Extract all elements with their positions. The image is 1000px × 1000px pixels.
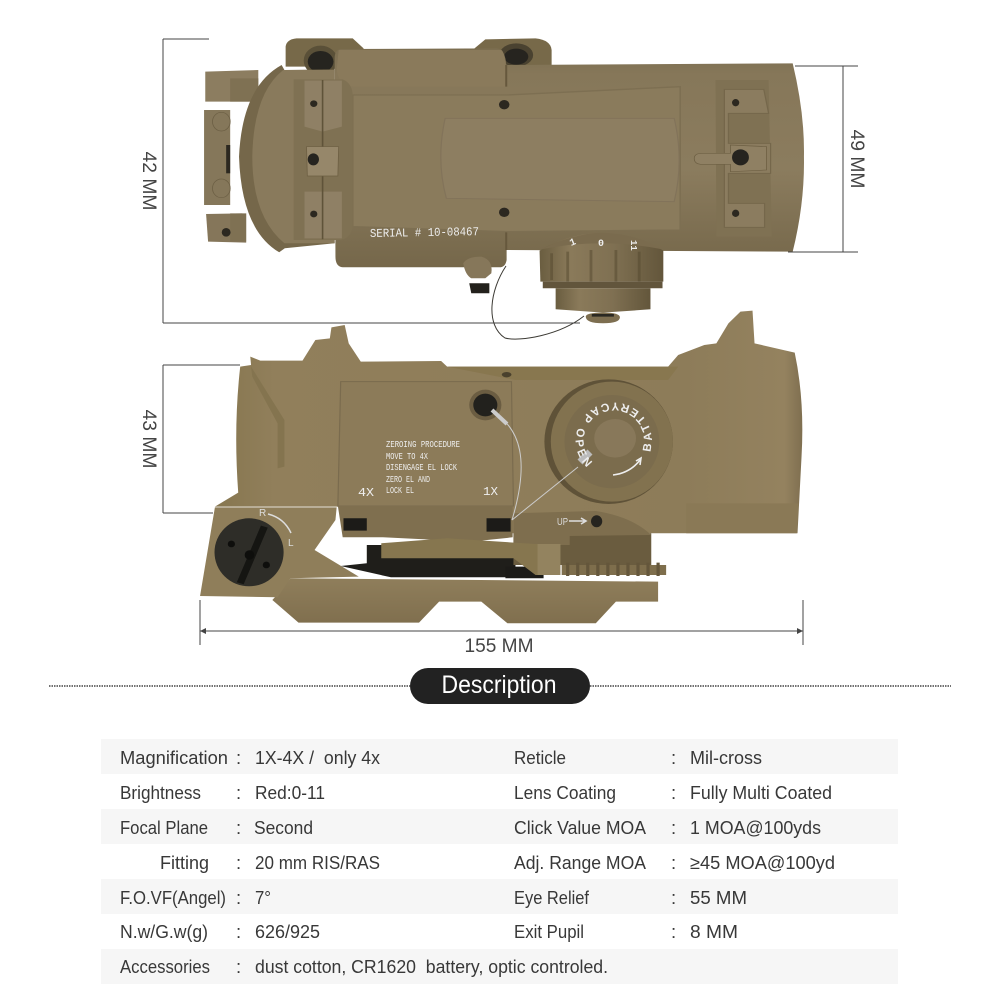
section divider [49, 668, 951, 704]
lower front shade [686, 503, 799, 533]
right values: Fully Multi Coated [690, 782, 832, 803]
colons: : [236, 782, 241, 803]
left values: Second [254, 817, 313, 838]
colons: : [236, 817, 241, 838]
left labels: Accessories [120, 956, 210, 977]
rail shadow parts [341, 545, 544, 578]
colons [236, 747, 676, 977]
right values: 55 MM [690, 887, 747, 908]
clamp box [338, 372, 513, 542]
right labels: Exit Pupil [514, 921, 584, 942]
left values: dust cotton, CR1620 battery, optic controled. [255, 956, 608, 977]
engraved marks: L [288, 538, 294, 549]
lever and gear [381, 538, 666, 576]
lanyard wires [492, 266, 590, 520]
dimension: 42 MM [138, 39, 580, 323]
top view scope [204, 38, 804, 323]
up screw [591, 515, 602, 527]
engraved marks [259, 225, 638, 549]
battery cap lettering: BATTERYCAP OPEN [576, 402, 652, 467]
raised plate [441, 118, 679, 202]
colons: : [671, 921, 676, 942]
main body [335, 48, 804, 267]
mount foot [200, 507, 359, 597]
colons: : [236, 747, 241, 768]
body screws [499, 100, 509, 217]
engraved marks: DISENGAGE EL LOCK [386, 463, 457, 473]
left values: 20 mm RIS/RAS [255, 852, 380, 873]
rail clamps with bolts [286, 38, 552, 76]
dimension: 155 MM: 155 MM [464, 636, 534, 657]
dimension: 43 MM [138, 365, 240, 513]
right values: 8 MM [690, 921, 738, 942]
left values: 626/925 [255, 921, 320, 942]
colons: : [236, 921, 241, 942]
row bands [101, 739, 898, 984]
colons: : [236, 956, 241, 977]
right labels: Eye Relief [514, 887, 590, 908]
engraved marks: ZEROING PROCEDURE [386, 440, 460, 450]
engraved marks: 1X [483, 485, 498, 499]
clamp top highlight [337, 50, 506, 87]
heading: Description: Description [442, 671, 556, 699]
left labels: Brightness [120, 782, 201, 803]
engraved marks: SERIAL # 10-08467 [370, 225, 479, 241]
left labels: N.w/G.w(g) [120, 921, 208, 942]
right labels [514, 747, 647, 942]
right values [690, 747, 835, 942]
colons: : [671, 747, 676, 768]
colons: : [671, 817, 676, 838]
right values: ≥45 MOA@100yd [690, 852, 835, 873]
lanyard bolt [463, 257, 492, 293]
side body [215, 311, 802, 533]
left values: 1X-4X / only 4x [255, 747, 381, 768]
left labels: Magnification [120, 747, 228, 768]
colons: : [236, 887, 241, 908]
body channel [353, 87, 680, 232]
rear sight rail [294, 79, 353, 240]
up ledge [513, 511, 651, 545]
colons: : [671, 887, 676, 908]
right labels: Lens Coating [514, 782, 616, 803]
left values: 7° [255, 887, 271, 908]
colons: : [671, 782, 676, 803]
colons: : [236, 852, 241, 873]
engraved marks: 4X [358, 486, 374, 500]
engraved marks: MOVE TO 4X [386, 452, 428, 462]
eyepiece ridge [251, 367, 284, 468]
left labels: Fitting [160, 852, 209, 873]
left values [254, 747, 608, 977]
engraved marks: 0 [598, 239, 604, 250]
turret housing [513, 533, 651, 565]
elevation dial [540, 233, 663, 323]
heading: Description [410, 668, 590, 704]
top ridge [447, 367, 678, 380]
specification table [101, 739, 898, 984]
front sight rail [694, 80, 772, 237]
engraved marks: ZERO EL AND [386, 475, 430, 485]
engraved marks: R [259, 508, 266, 519]
left labels: F.O.VF(Angel) [120, 887, 226, 908]
left values: Red:0-11 [255, 782, 325, 803]
battery cap [544, 379, 673, 504]
base rail [272, 578, 658, 623]
rear rail mount [204, 70, 258, 243]
dimension: 49 MM: 49 MM [846, 129, 867, 189]
engraved marks: UP [557, 517, 568, 528]
engraved marks: LOCK EL [386, 486, 414, 496]
right values: Mil-cross [690, 747, 762, 768]
left labels [120, 747, 228, 977]
engraved marks: 11 [628, 240, 638, 251]
engraved marks: 1 [568, 237, 578, 250]
dimension: 42 MM: 42 MM [138, 151, 159, 211]
right labels: Adj. Range MOA [514, 852, 647, 873]
windage knob [215, 518, 284, 586]
right labels: Click Value MOA [514, 817, 647, 838]
dimension: 49 MM [788, 66, 867, 252]
right values: 1 MOA@100yds [690, 817, 821, 838]
left labels: Focal Plane [120, 817, 208, 838]
clamp edge shadow [504, 65, 509, 250]
dimension: 43 MM: 43 MM [138, 409, 159, 469]
eyepiece [239, 65, 335, 252]
right labels: Reticle [514, 747, 566, 768]
colons: : [671, 852, 676, 873]
dimension: 155 MM [200, 600, 803, 657]
side view scope [200, 311, 802, 623]
